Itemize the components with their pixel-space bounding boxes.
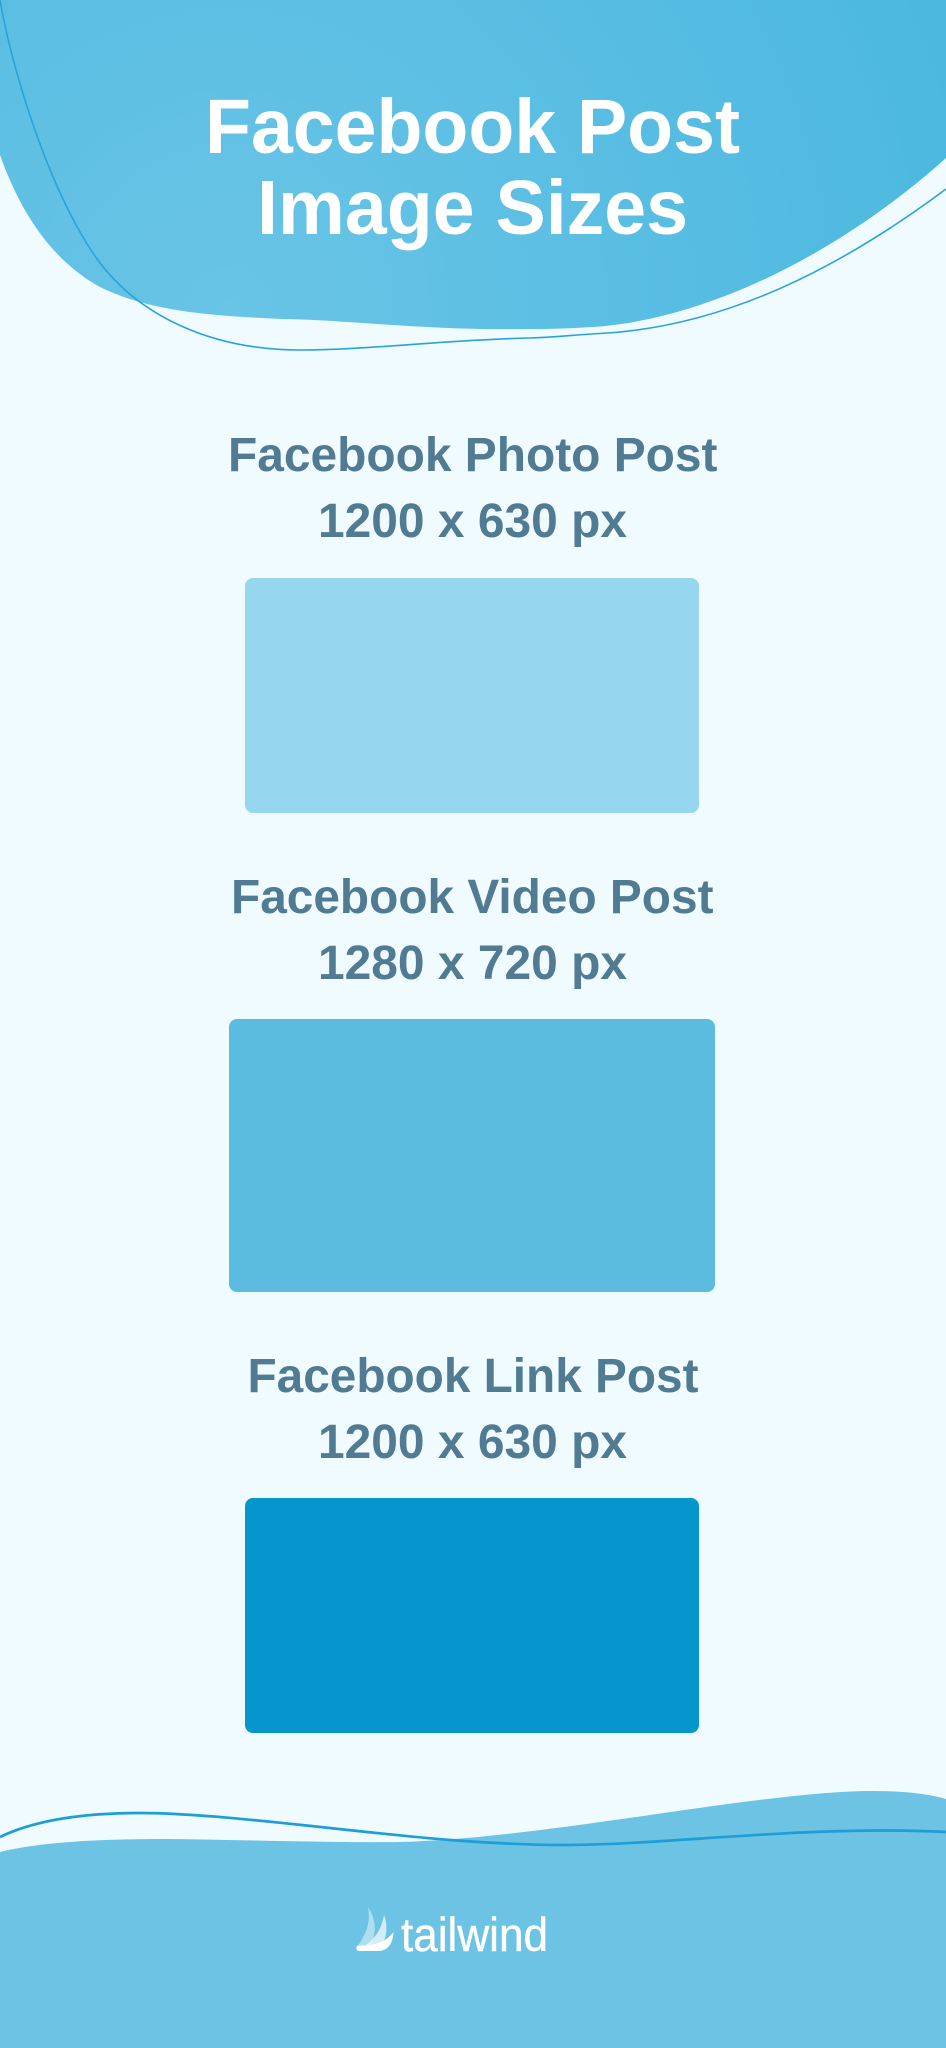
icon: sail xyxy=(356,1907,394,1951)
footer wave shape xyxy=(0,1791,946,2048)
link post heading: 1200 x 630 px xyxy=(318,1416,627,1469)
photo post heading xyxy=(228,429,718,548)
header accent line xyxy=(0,0,946,350)
logo wordmark: tailwind xyxy=(401,1908,548,1961)
link post heading: Facebook Link Post xyxy=(248,1350,699,1403)
section: photo post xyxy=(228,429,718,813)
photo post heading: 1200 x 630 px xyxy=(318,495,627,548)
footer accent line xyxy=(0,1813,946,1845)
title: Facebook Post xyxy=(205,84,740,170)
title: Image Sizes xyxy=(257,165,688,251)
link post heading xyxy=(248,1350,699,1469)
video post heading: 1280 x 720 px xyxy=(318,937,627,990)
section: video post xyxy=(229,871,715,1292)
header banner xyxy=(0,0,946,350)
tailwind logo xyxy=(356,1907,548,1961)
video post size rectangle xyxy=(229,1019,715,1292)
photo post size rectangle xyxy=(245,578,699,813)
photo post heading: Facebook Photo Post xyxy=(228,429,718,482)
video post heading xyxy=(231,871,714,990)
footer band xyxy=(0,1791,946,2048)
link post size rectangle xyxy=(245,1498,699,1733)
title xyxy=(205,84,740,251)
video post heading: Facebook Video Post xyxy=(231,871,714,924)
section: link post xyxy=(245,1350,699,1733)
header blob shape xyxy=(0,0,946,329)
